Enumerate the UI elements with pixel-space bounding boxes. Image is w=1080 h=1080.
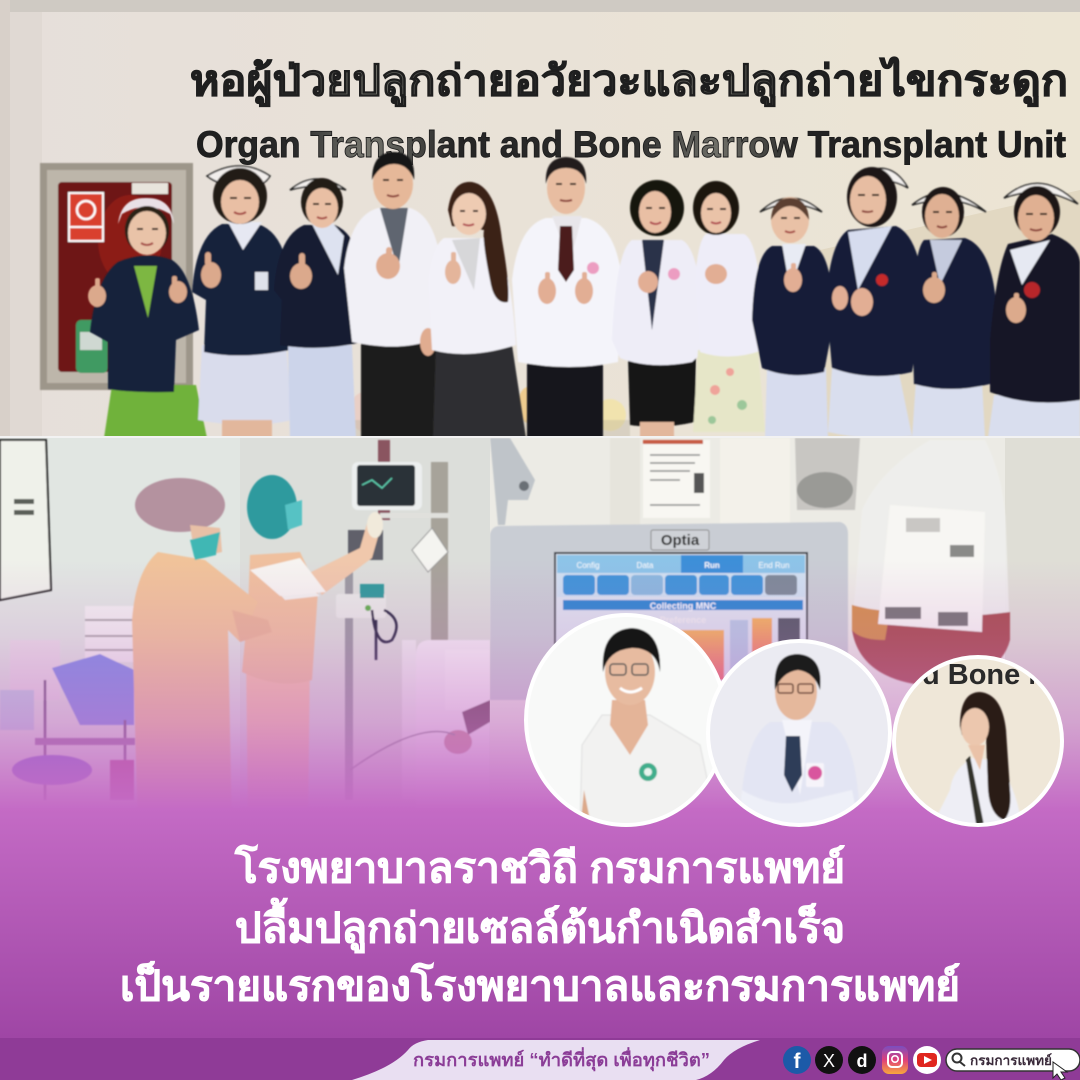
icon: facebook: [783, 1046, 811, 1074]
flowers behind the staff: [349, 387, 630, 438]
person 9: [752, 197, 834, 438]
person 7: [618, 179, 700, 436]
machine touch screen: Config: [576, 561, 600, 570]
person 5: [428, 182, 526, 438]
curtain folds: [611, 439, 639, 524]
machine touch screen: Run: [704, 561, 720, 570]
person 8: [693, 181, 765, 432]
portrait: second physician: [705, 638, 895, 830]
icon: instagram: [882, 1046, 908, 1074]
search pill: [946, 1049, 1080, 1071]
background: purple gradient panel: [0, 808, 1080, 1080]
icon: tiktok: [848, 1046, 876, 1074]
machine touch screen: Collection Preference: [614, 615, 706, 625]
staff group: [88, 152, 1080, 438]
slogan ribbon: [352, 1040, 760, 1080]
IV pole and equipment: [336, 440, 450, 800]
sign: Thai unit name: หอผู้ป่วยปลูกถ่ายอวัยวะและปลูกถ่ายไขกระดูก: [190, 56, 1068, 107]
person 11: [912, 187, 997, 438]
machine body: [490, 522, 848, 700]
icon: X: X: [823, 1051, 835, 1071]
photo: nurses at bedside: [0, 438, 490, 838]
person 12: [988, 183, 1080, 438]
trolley with supplies: [0, 606, 135, 800]
icon: facebook: f: [794, 1050, 802, 1073]
photo: group portrait at transplant unit: [0, 0, 1080, 438]
portrait: first physician: [520, 610, 732, 830]
machine touch screen: [553, 551, 809, 681]
photo: apheresis machine and collection bag: [490, 438, 1080, 838]
portrait: third physician: [890, 654, 1066, 830]
machine touch screen: Collecting MNC: [650, 601, 717, 611]
icon: youtube: [913, 1046, 941, 1074]
person 1: [88, 198, 207, 438]
icon: mouse cursor: [1053, 1062, 1067, 1080]
headline: [120, 844, 960, 1009]
arm: [490, 438, 535, 525]
person 10: [826, 167, 925, 438]
bed: [353, 639, 490, 768]
fire hose cabinet: [40, 163, 193, 390]
wall panel: [0, 440, 51, 600]
person 6: [512, 157, 622, 438]
machine touch screen: Data: [637, 561, 654, 570]
headline line 2: ปลื้มปลูกถ่ายเซลล์ต้นกำเนิดสำเร็จ: [235, 898, 845, 954]
person 4: [344, 152, 442, 438]
headline line 1: โรงพยาบาลราชวิถี กรมการแพทย์: [234, 844, 845, 891]
person 3: [274, 178, 363, 438]
wall sign text in portrait: d Bone N: [922, 659, 1049, 691]
sign: English unit name: Organ Transplant and Bone Marrow Transplant Unit: [196, 124, 1066, 165]
nurse writing: [132, 477, 326, 790]
machine brand label: Optia: [661, 532, 700, 549]
slogan text: กรมการแพทย์ “ทำดีที่สุด เพื่อทุกชีวิต”: [413, 1047, 710, 1072]
IV bag label: [643, 440, 710, 518]
icon: tiktok: d: [856, 1051, 868, 1071]
search text: กรมการแพทย์: [970, 1053, 1052, 1068]
person 2: [192, 166, 292, 438]
collection bag: [851, 504, 1011, 684]
footer bar: [0, 1038, 1080, 1080]
nurse at IV pump: [242, 474, 384, 780]
gradient fade over lower photos: [0, 560, 1080, 810]
headline line 3: เป็นรายแรกของโรงพยาบาลและกรมการแพทย์: [120, 961, 960, 1009]
icon: X: [815, 1046, 843, 1074]
machine touch screen: End Run: [758, 561, 790, 570]
